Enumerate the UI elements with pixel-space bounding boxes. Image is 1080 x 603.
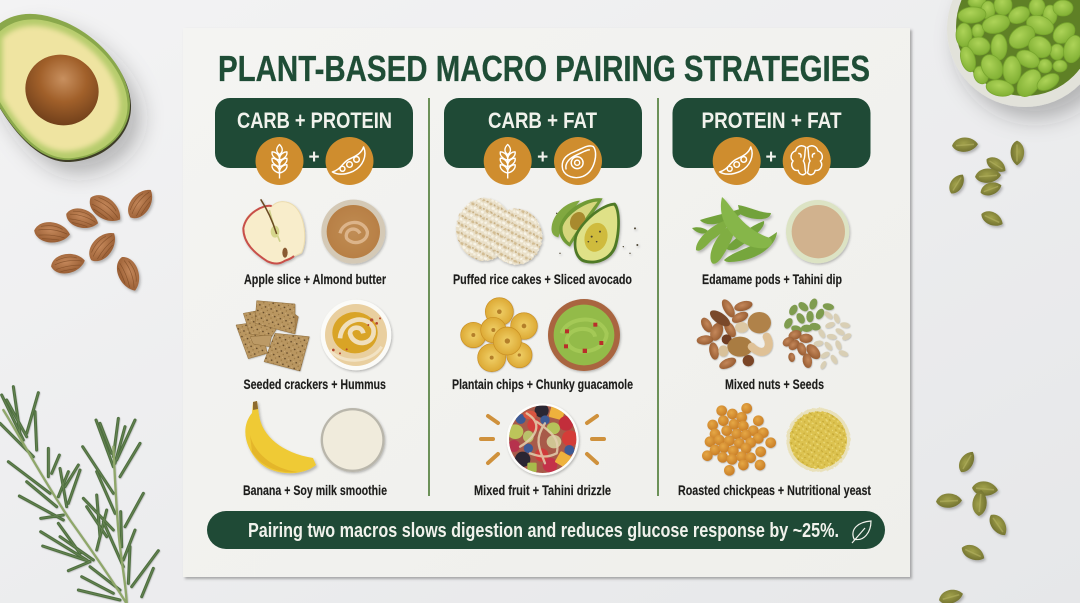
label: apple slice + almond butter: Apple slice + Almond butter (244, 272, 387, 287)
header: protein + fat: PROTEIN + FAT (702, 108, 842, 133)
label: mixed nuts + seeds: Mixed nuts + Seeds (725, 377, 824, 392)
icon: radiating accent lines (481, 416, 604, 463)
label: puffed rice cakes + sliced avocado: Puffed rice cakes + Sliced avocado (453, 272, 632, 287)
food: apple slice (243, 199, 305, 264)
food: edamame pods (692, 197, 777, 264)
label: edamame pods + tahini dip: Edamame pods + Tahini dip (702, 272, 842, 287)
illustration: bowl of edamame (947, 0, 1080, 107)
food: tahini dip (786, 200, 849, 263)
header: protein + fat: + (765, 147, 777, 168)
header: carb + fat: CARB + FAT (488, 108, 597, 133)
panel: infographic card (183, 28, 910, 577)
icon: leaf (852, 521, 871, 543)
title: PLANT-BASED MACRO PAIRING STRATEGIES (218, 48, 870, 89)
illustration: rosemary sprigs (0, 387, 158, 603)
header: carb + fat (444, 98, 642, 185)
header: carb + protein: CARB + PROTEIN (237, 108, 392, 133)
callout banner (207, 511, 885, 549)
illustration: halved avocado (0, 14, 131, 162)
illustration: pumpkin seeds upper right (946, 137, 1024, 229)
food: seeded crackers (236, 301, 309, 371)
food: plantain chips (461, 298, 537, 372)
food: sliced avocado (551, 198, 638, 264)
divider: columns one and two (428, 98, 430, 496)
food: roasted chickpeas (702, 403, 776, 476)
header: carb + fat: + (537, 147, 548, 168)
divider: columns two and three (657, 98, 659, 496)
food: soy milk smoothie (321, 408, 385, 472)
header: carb + protein (215, 98, 413, 185)
label: plantain chips + chunky guacamole: Plantain chips + Chunky guacamole (452, 377, 633, 392)
label: seeded crackers + hummus: Seeded crackers + Hummus (244, 377, 386, 392)
header: protein + fat (672, 98, 870, 185)
illustration: scattered almonds (33, 184, 159, 294)
food: mixed nuts (696, 297, 771, 371)
label: banana + soy milk smoothie: Banana + Soy milk smoothie (243, 483, 387, 498)
food: banana (245, 401, 316, 473)
food: puffed rice cakes (456, 198, 542, 265)
illustration: pumpkin seeds lower right (936, 448, 1011, 603)
food: mixed fruit with tahini drizzle (507, 403, 579, 475)
food: mixed seeds (781, 297, 852, 370)
callout banner: Pairing two macros slows digestion and reduces glucose response by ~25%. (248, 520, 839, 542)
label: roasted chickpeas + nutritional yeast: Roasted chickpeas + Nutritional yeast (678, 483, 871, 498)
food: almond butter (321, 200, 385, 264)
food: hummus (321, 300, 391, 370)
label: mixed fruit + tahini drizzle: Mixed fruit + Tahini drizzle (474, 483, 611, 498)
food: nutritional yeast (786, 408, 850, 472)
header: carb + protein: + (308, 147, 320, 168)
food: chunky guacamole (548, 299, 620, 371)
